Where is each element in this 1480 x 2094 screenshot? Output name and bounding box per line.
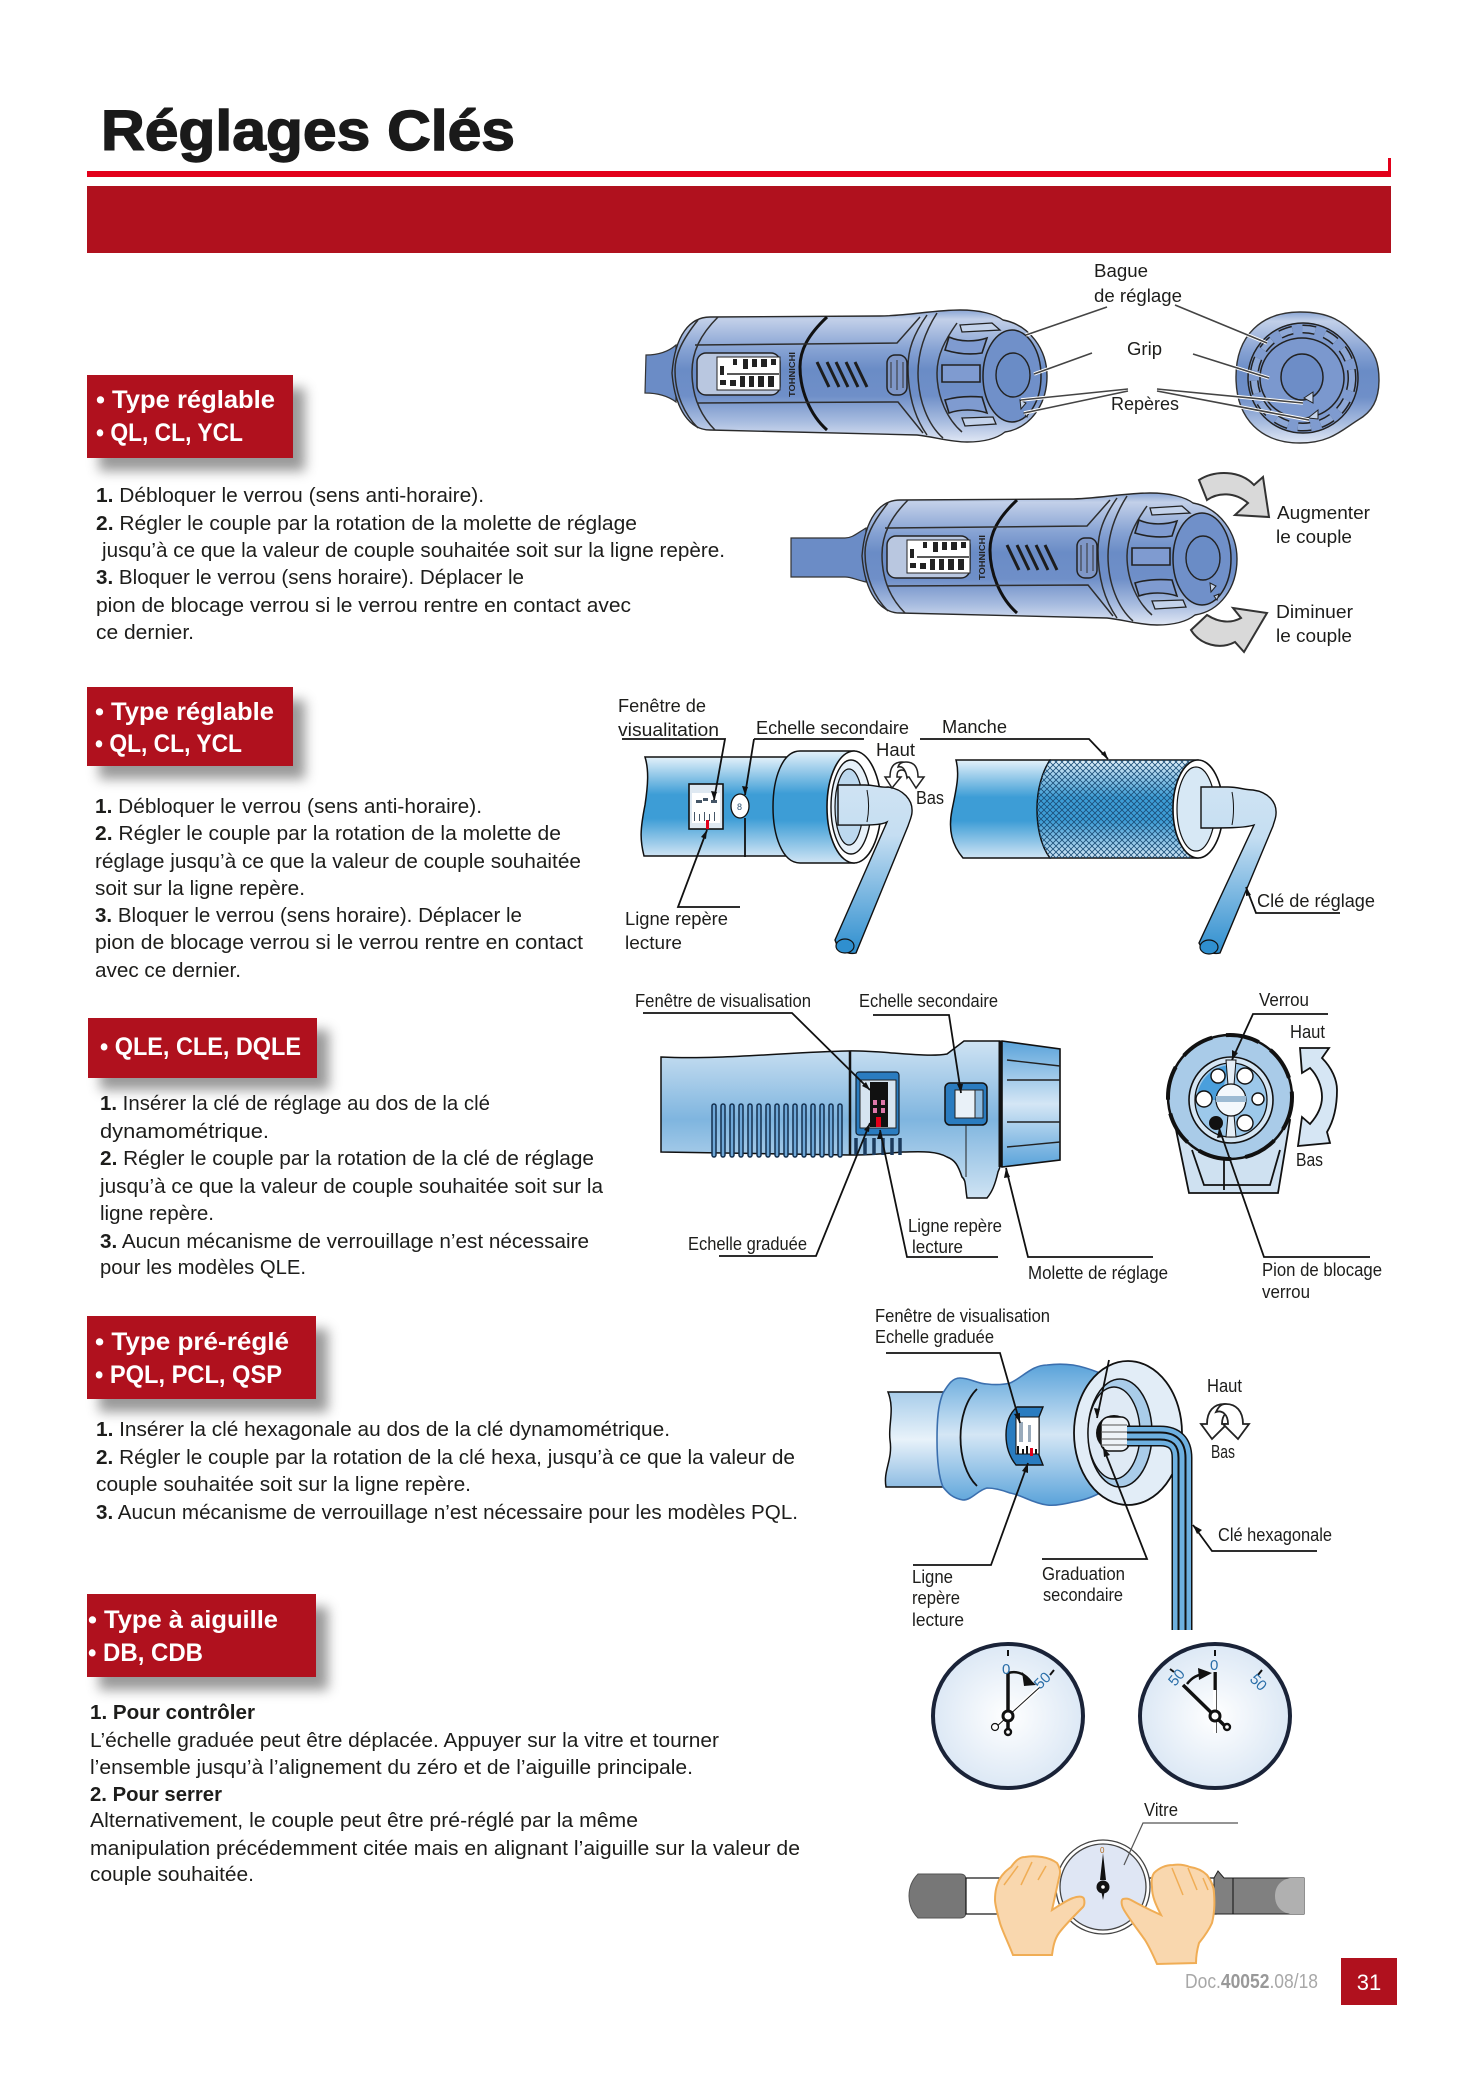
- text block: type réglable 2: 1. Débloquer le verrou (sens anti-horaire).: [95, 796, 482, 818]
- text block: QLE: dynamométrique.: [100, 1121, 269, 1143]
- labels: hex diagram: Graduation: [1042, 1564, 1125, 1584]
- text block: type pré-réglé: couple souhaitée soit sur la ligne repère.: [96, 1474, 471, 1496]
- illustration: hands turning dial: 0: [1100, 1846, 1105, 1855]
- labels: rotation: le couple: [1276, 626, 1352, 646]
- badge: type à aiguille: • DB, CDB: [88, 1639, 203, 1667]
- labels: key diagram: Bas: [916, 788, 944, 808]
- text block: QLE: jusqu’à ce que la valeur de couple souhaitée soit sur la: [99, 1176, 604, 1198]
- dial: needle setting: [1140, 1644, 1290, 1788]
- text block: type pré-réglé: [96, 1419, 798, 1524]
- arrow: increase torque: [1199, 473, 1269, 517]
- leader lines: hex diagram: [886, 1353, 1317, 1565]
- title: Réglages Clés: [101, 99, 515, 163]
- dial: needle setting: 0: [1210, 1657, 1218, 1674]
- badge: type réglable 2: [87, 687, 305, 779]
- text block: type réglable 2: réglage jusqu’à ce que la valeur de couple souhaitée: [95, 851, 581, 873]
- text block: QLE: ligne repère.: [100, 1203, 214, 1225]
- badge: type réglable 2: • QL, CL, YCL: [95, 730, 242, 758]
- dial: zero alignment: 50: [1031, 1669, 1055, 1693]
- text block: type pré-réglé: 1. Insérer la clé hexagonale au dos de la clé dynamométrique.: [96, 1419, 670, 1441]
- labels: key diagram: Echelle secondaire: [756, 718, 909, 738]
- labels: ring, grip, marks: Grip: [1127, 339, 1162, 359]
- labels: QLE diagram: Haut: [1290, 1022, 1325, 1042]
- labels: hex diagram: Bas: [1211, 1442, 1235, 1462]
- title rule: [87, 158, 1391, 177]
- leader lines: ring, grip, marks: [1021, 305, 1309, 420]
- text block: QLE: pour les modèles QLE.: [100, 1257, 306, 1279]
- labels: QLE diagram: Fenêtre de visualisation: [635, 991, 811, 1011]
- icon: QLE rotation arrow: [1298, 1048, 1337, 1146]
- text block: type à aiguille: 2. Pour serrer: [90, 1784, 222, 1806]
- badge: QLE, CLE, DQLE: [88, 1018, 329, 1090]
- illustration: hands turning dial: [909, 1840, 1304, 1964]
- labels: key diagram: Clé de réglage: [1257, 891, 1375, 911]
- labels: hex diagram: secondaire: [1043, 1585, 1123, 1605]
- labels: ring, grip, marks: [1094, 261, 1182, 414]
- page number box: [1341, 1958, 1397, 2005]
- arrow: decrease torque: [1191, 608, 1267, 652]
- labels: QLE diagram: Molette de réglage: [1028, 1263, 1168, 1283]
- illustration: adjustable key, handle side: [950, 760, 1276, 954]
- labels: ring, grip, marks: Repères: [1111, 394, 1179, 414]
- labels: QLE diagram: Verrou: [1259, 990, 1309, 1010]
- labels: rotation: Augmenter: [1277, 503, 1370, 523]
- labels: hex diagram: Echelle graduée: [875, 1327, 994, 1347]
- text block: type réglable 2: soit sur la ligne repère.: [95, 878, 305, 900]
- text block: QLE: 3. Aucun mécanisme de verrouillage n’est nécessaire: [100, 1231, 589, 1253]
- text block: type à aiguille: couple souhaitée.: [90, 1864, 254, 1886]
- illustration: adjustable key, window side: 8: [737, 802, 742, 812]
- text block: QLE: 2. Régler le couple par la rotation de la clé de réglage: [100, 1148, 594, 1170]
- labels: hex diagram: Ligne: [912, 1567, 953, 1587]
- red band: [87, 186, 1391, 253]
- badge: QLE, CLE, DQLE: • QLE, CLE, DQLE: [100, 1033, 301, 1061]
- labels: hex diagram: [875, 1306, 1332, 1630]
- labels: hex diagram: Clé hexagonale: [1218, 1525, 1332, 1545]
- labels: key diagram: visualitation: [618, 720, 719, 740]
- text block: type à aiguille: 1. Pour contrôler: [90, 1702, 255, 1724]
- labels: hex diagram: lecture: [912, 1610, 964, 1630]
- text block: type réglable 2: avec ce dernier.: [95, 960, 241, 982]
- label: glass: [1124, 1800, 1238, 1865]
- illustration: wrench with rotation: [791, 493, 1237, 625]
- labels: key diagram: Fenêtre de: [618, 696, 706, 716]
- dial: needle setting: 50: [1165, 1666, 1189, 1690]
- text block: type à aiguille: Alternativement, le couple peut être pré-réglé par la même: [90, 1810, 638, 1832]
- leader lines: QLE diagram: [643, 1013, 1370, 1257]
- illustration: preset wrench with hex key: [885, 1361, 1182, 1630]
- labels: hex diagram: repère: [912, 1588, 960, 1608]
- leader lines: key diagram: [622, 739, 1340, 913]
- badge: type à aiguille: • Type à aiguille: [88, 1606, 278, 1634]
- labels: QLE diagram: Ligne repère: [908, 1216, 1002, 1236]
- labels: QLE diagram: verrou: [1262, 1282, 1310, 1302]
- illustration: wrench end view: [1236, 312, 1379, 443]
- text block: type à aiguille: L’échelle graduée peut être déplacée. Appuyer sur la vitre et tourner: [90, 1730, 719, 1752]
- dial: zero alignment: [933, 1644, 1083, 1788]
- labels: QLE diagram: Bas: [1296, 1150, 1323, 1170]
- illustration: QLE wrench side view: [661, 1041, 1060, 1198]
- footer: document reference: Doc.40052.08/18: [1185, 1971, 1318, 1993]
- labels: QLE diagram: [635, 990, 1382, 1302]
- text block: type réglable 2: 3. Bloquer le verrou (sens horaire). Déplacer le: [95, 905, 522, 927]
- page number box: 31: [1357, 1970, 1381, 1995]
- badge: type réglable 1: • QL, CL, YCL: [96, 419, 243, 447]
- labels: rotation: [1276, 503, 1370, 646]
- labels: ring, grip, marks: de réglage: [1094, 286, 1182, 306]
- text block: type réglable 1: jusqu’à ce que la valeur de couple souhaitée soit sur la ligne repère.: [101, 540, 725, 562]
- labels: hex diagram: Fenêtre de visualisation: [875, 1306, 1050, 1326]
- badge: type réglable 1: [87, 375, 305, 471]
- icon: up/down rotation arrows (hex): [1201, 1404, 1249, 1439]
- labels: key diagram: Ligne repère: [625, 909, 728, 929]
- badge: type réglable 2: • Type réglable: [95, 698, 274, 726]
- illustration: QLE end view: [1168, 1035, 1292, 1193]
- text block: type réglable 2: pion de blocage verrou si le verrou rentre en contact: [95, 932, 583, 954]
- labels: key diagram: [618, 696, 1375, 953]
- badge: type pré-réglé: [87, 1316, 328, 1412]
- text block: type à aiguille: [90, 1702, 800, 1886]
- text block: type réglable 2: [95, 796, 583, 982]
- illustration: wrench with adjustment ring: [645, 310, 1047, 442]
- labels: hex diagram: Haut: [1207, 1376, 1242, 1396]
- labels: key diagram: lecture: [625, 933, 682, 953]
- badge: type réglable 1: • Type réglable: [96, 386, 275, 414]
- illustration: adjustable key, window side: [641, 751, 912, 953]
- label: glass: Vitre: [1144, 1800, 1178, 1820]
- text block: type réglable 1: [96, 485, 725, 644]
- text block: QLE: 1. Insérer la clé de réglage au dos de la clé: [100, 1093, 490, 1115]
- text block: type pré-réglé: 2. Régler le couple par la rotation de la clé hexa, jusqu’à ce que la valeur de: [96, 1447, 795, 1469]
- labels: ring, grip, marks: Bague: [1094, 261, 1148, 281]
- text block: type réglable 1: 2. Régler le couple par la rotation de la molette de réglage: [96, 513, 637, 535]
- icon: up/down rotation arrows: [885, 762, 924, 788]
- labels: rotation: le couple: [1276, 527, 1352, 547]
- text block: type à aiguille: manipulation précédemment citée mais en alignant l’aiguille sur la valeur de: [90, 1838, 800, 1860]
- badge: type à aiguille: [87, 1594, 328, 1690]
- text block: type à aiguille: l’ensemble jusqu’à l’alignement du zéro et de l’aiguille principale.: [90, 1757, 693, 1779]
- labels: QLE diagram: lecture: [912, 1237, 963, 1257]
- text block: QLE: [99, 1093, 604, 1279]
- text block: type réglable 2: 2. Régler le couple par la rotation de la molette de: [95, 823, 561, 845]
- badge: type pré-réglé: • PQL, PCL, QSP: [95, 1361, 282, 1389]
- text block: type réglable 1: 3. Bloquer le verrou (sens horaire). Déplacer le: [96, 567, 524, 589]
- labels: QLE diagram: Echelle secondaire: [859, 991, 998, 1011]
- text block: type réglable 1: ce dernier.: [96, 622, 194, 644]
- dial: needle setting: 50: [1246, 1671, 1270, 1695]
- labels: rotation: Diminuer: [1276, 602, 1353, 622]
- labels: key diagram: Haut: [876, 740, 915, 760]
- labels: QLE diagram: Echelle graduée: [688, 1234, 807, 1254]
- text block: type réglable 1: pion de blocage verrou si le verrou rentre en contact avec: [96, 595, 631, 617]
- illustration: wrench with adjustment ring: TOHNICHI: [788, 352, 797, 397]
- labels: key diagram: Manche: [942, 717, 1007, 737]
- text block: type réglable 1: 1. Débloquer le verrou (sens anti-horaire).: [96, 485, 484, 507]
- dial: zero alignment: 0: [1002, 1661, 1010, 1678]
- illustration: wrench with rotation: TOHNICHI: [978, 535, 987, 580]
- labels: QLE diagram: Pion de blocage: [1262, 1260, 1382, 1280]
- badge: type pré-réglé: • Type pré-réglé: [95, 1328, 289, 1356]
- text block: type pré-réglé: 3. Aucun mécanisme de verrouillage n’est nécessaire pour les modèles PQL.: [96, 1502, 798, 1524]
